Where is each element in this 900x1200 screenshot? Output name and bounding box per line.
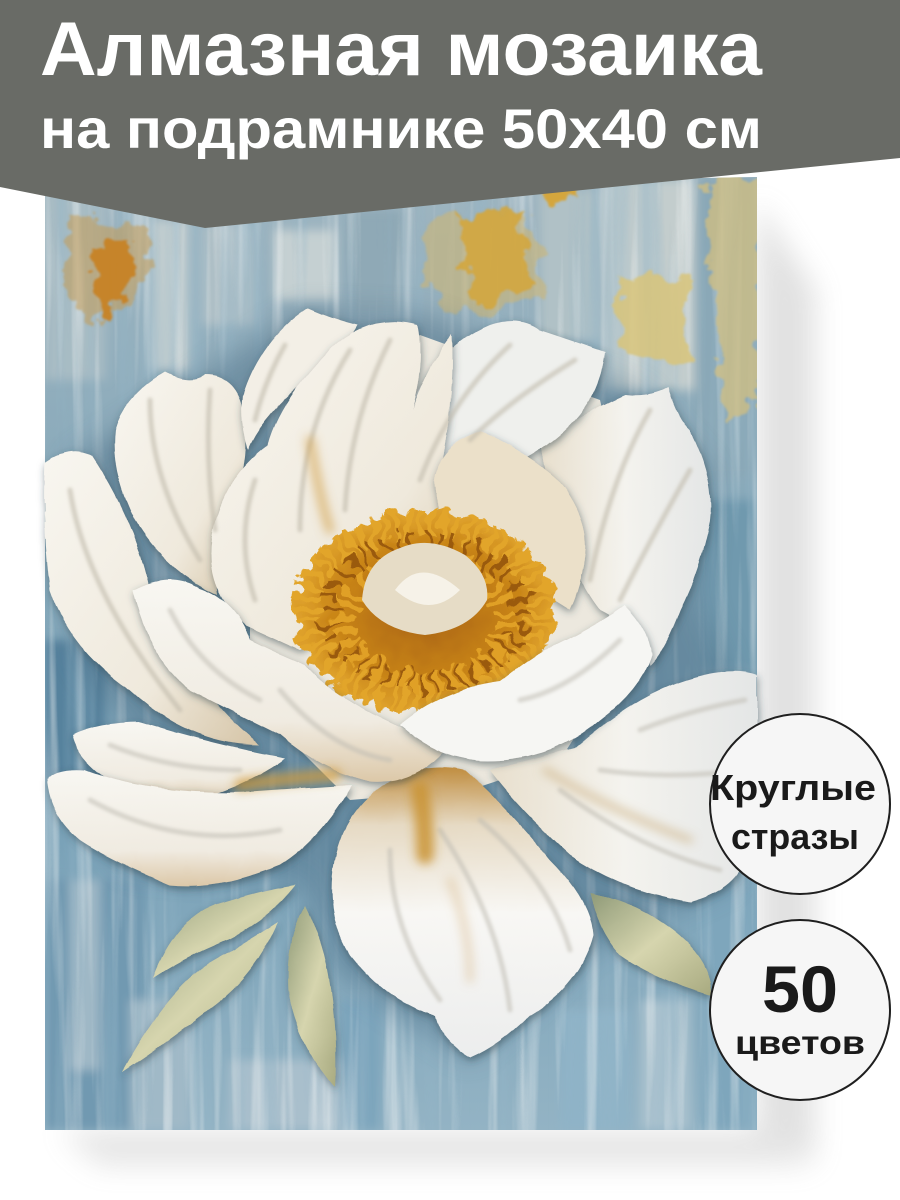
petal: outer left: [44, 451, 260, 745]
stamens strokes: [307, 524, 543, 700]
painting: blue background: [45, 170, 757, 1130]
badge: round rhinestones: стразы: [731, 816, 859, 857]
petal: upper left: [114, 372, 246, 595]
petal: upper right: [540, 388, 711, 665]
petal: top right: [400, 321, 605, 480]
painting: fine light streaks: [45, 170, 757, 1130]
petal: front left: [133, 579, 445, 782]
flower centre: stamens: [295, 512, 555, 712]
upper petal ridges: [70, 340, 690, 710]
badge: 50 colours: 50: [762, 952, 838, 1026]
petal: inner right cream: [434, 432, 586, 610]
header banner: [0, 0, 900, 228]
petal: lower right: [490, 671, 757, 902]
petal: lower left top: [72, 722, 285, 803]
painting: fine dark streaks: [45, 170, 757, 1130]
badge: round rhinestones: [710, 714, 890, 894]
badge: 50 colours: [710, 920, 890, 1100]
lower petal ridges: [90, 610, 745, 1010]
bud: [362, 543, 487, 635]
flower body underlay: [250, 335, 650, 800]
petal: bottom centre: [332, 767, 593, 1058]
stamens base: [295, 512, 555, 712]
painting: brush streaks: [45, 177, 757, 1130]
badge: 50 colours: цветов: [735, 1024, 865, 1061]
badge: round rhinestones: Круглые: [710, 767, 876, 808]
petal: top left: [242, 308, 358, 450]
painting: [45, 170, 760, 1130]
flower shadow: [70, 310, 735, 1060]
title: [40, 7, 763, 160]
petal: top centre: [211, 322, 460, 650]
flower: [44, 308, 757, 1088]
petal: front right: [400, 605, 652, 761]
petal shading: [240, 440, 690, 980]
title line 1: Алмазная мозаика: [40, 7, 763, 92]
petal: lower left: [47, 770, 352, 886]
title line 2: на подрамнике 50х40 см: [40, 97, 762, 160]
painting: gold leaf: [70, 175, 760, 420]
leaves: [122, 885, 712, 1088]
canvas shadow: [60, 200, 815, 1165]
